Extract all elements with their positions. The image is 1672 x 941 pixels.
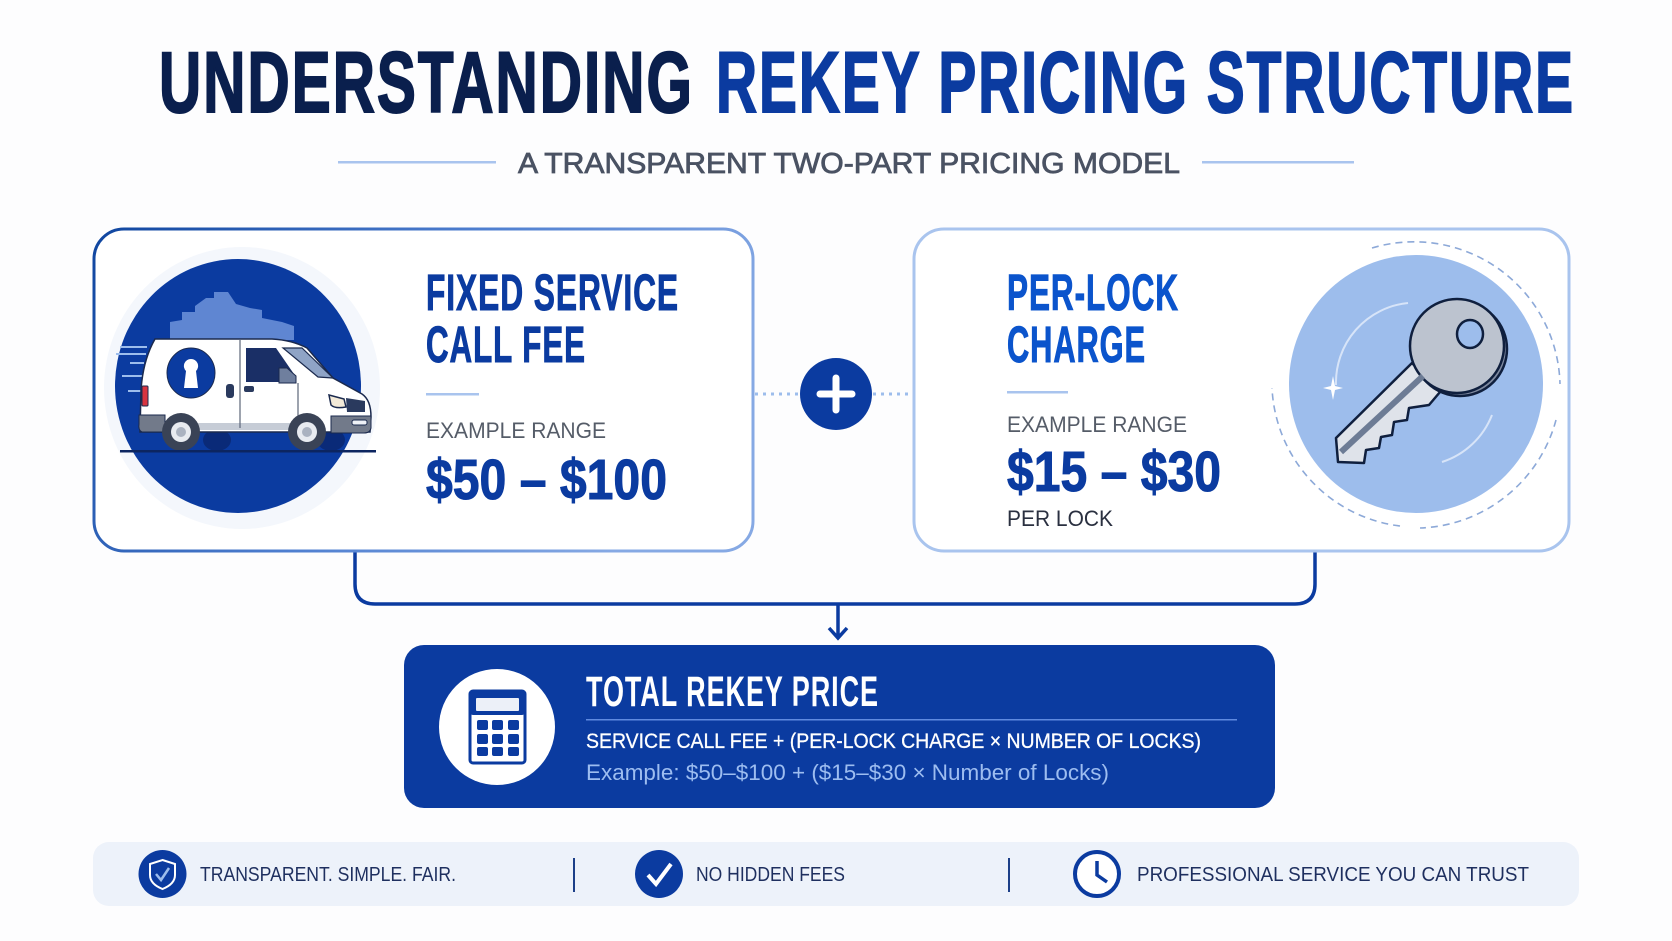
text: professional service: PROFESSIONAL SERVICE YOU CAN TRUST bbox=[1137, 863, 1529, 886]
bracket connector and arrow bbox=[355, 552, 1315, 638]
heading: fixed service call fee bbox=[426, 264, 679, 373]
label: example range: EXAMPLE RANGE bbox=[1007, 412, 1187, 437]
title bbox=[159, 35, 1575, 131]
heading: per-lock charge: PER-LOCK bbox=[1007, 264, 1179, 321]
heading: fixed service call fee: FIXED SERVICE bbox=[426, 264, 679, 321]
heading: per-lock charge: CHARGE bbox=[1007, 316, 1146, 373]
panel: total rekey price bbox=[404, 645, 1275, 808]
text: transparent simple fair: TRANSPARENT. SIMPLE. FAIR. bbox=[200, 863, 456, 886]
formula: SERVICE CALL FEE + (PER-LOCK CHARGE × NUMBER OF LOCKS) bbox=[586, 730, 1201, 753]
icon: clock bbox=[1075, 852, 1119, 896]
heading: fixed service call fee: CALL FEE bbox=[426, 316, 586, 373]
panel: fixed service call fee bbox=[94, 229, 753, 551]
icon: shield bbox=[138, 850, 186, 898]
text: no hidden fees: NO HIDDEN FEES bbox=[696, 863, 845, 886]
label: per lock: PER LOCK bbox=[1007, 506, 1113, 531]
icon: service van bbox=[104, 247, 380, 529]
subtitle: A TRANSPARENT TWO-PART PRICING MODEL bbox=[518, 148, 1180, 180]
icon: check bbox=[635, 850, 683, 898]
price: per-lock: $15 – $30 bbox=[1007, 440, 1221, 504]
label: example range: EXAMPLE RANGE bbox=[426, 418, 606, 443]
title: UNDERSTANDING bbox=[159, 35, 694, 131]
icon: calculator bbox=[439, 669, 555, 785]
icon: plus bbox=[800, 358, 872, 430]
connector: dotted line between cards bbox=[755, 392, 913, 396]
heading: per-lock charge bbox=[1007, 264, 1179, 373]
formula example: Example: $50–$100 + ($15–$30 × Number of Locks) bbox=[586, 760, 1109, 785]
panel: per-lock charge bbox=[914, 229, 1569, 551]
heading: total rekey price: TOTAL REKEY PRICE bbox=[586, 668, 879, 716]
icon: key bbox=[1272, 242, 1560, 528]
price: fixed fee: $50 – $100 bbox=[426, 448, 667, 512]
footer bar bbox=[93, 842, 1579, 906]
